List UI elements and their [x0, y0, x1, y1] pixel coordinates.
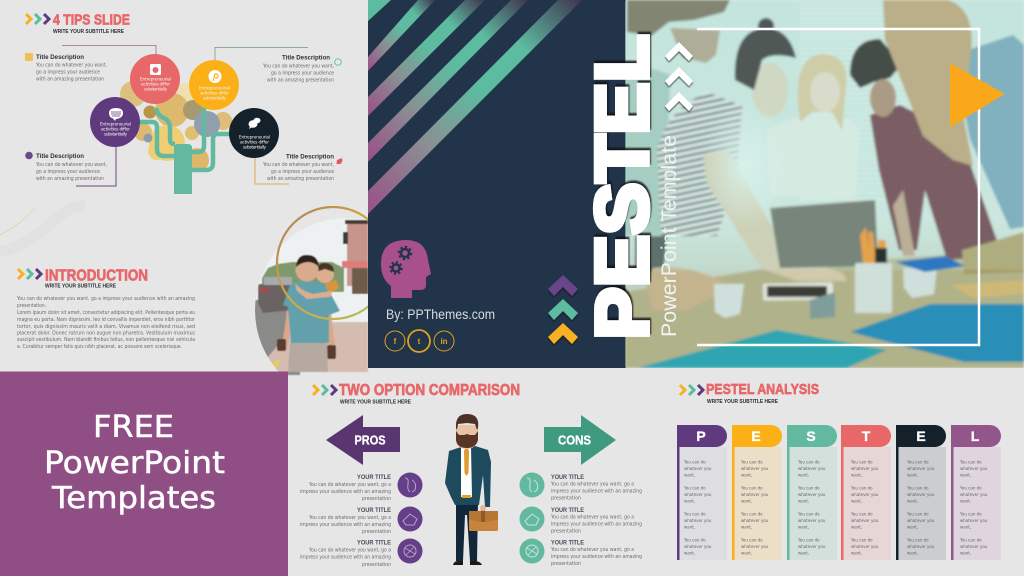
pros item 1 [300, 472, 422, 502]
column L: You can do [959, 512, 982, 516]
column L: whatever you [960, 518, 988, 523]
arrow: cons [544, 415, 616, 465]
column P: You can do [683, 460, 706, 464]
tip: top left [25, 53, 107, 82]
body text: a. Curabitur semper felis quis nibh placerat, ac posuere sem scelerisque. [17, 344, 182, 350]
social icons: f [394, 337, 397, 346]
column E (economic) [732, 425, 782, 560]
title: PESTEL: PESTEL [580, 34, 664, 340]
column S: want, [798, 498, 809, 504]
circle: chat: substantially [243, 144, 266, 150]
column T: T [862, 428, 871, 444]
soft glow [708, 113, 766, 218]
tip: top right: You can do whatever you want, [262, 64, 334, 70]
circle: speech: activities differ [101, 126, 130, 132]
subtitle: comparison: WRITE YOUR SUBTITLE HERE [340, 400, 411, 406]
tip: bottom right: You can do whatever you want, [262, 162, 334, 168]
tip: top right [262, 54, 341, 84]
pros items [300, 472, 422, 568]
cons item 2 [520, 506, 642, 534]
tip: bottom left: go a impress your audience [36, 169, 100, 175]
column E (economic): want, [741, 498, 752, 504]
circle: instagram [130, 54, 180, 104]
panel: free templates [0, 372, 288, 576]
tip: bottom right: go a impress your audience [271, 169, 334, 175]
panel heading: PowerPoint [44, 446, 225, 481]
circle: chat [229, 108, 279, 158]
cons item 1 [520, 472, 642, 502]
column E (environmental): want, [907, 524, 918, 530]
column L [951, 425, 1001, 560]
column L: whatever you [960, 544, 988, 549]
column P: You can do [683, 486, 706, 490]
column E (economic): whatever you [741, 544, 769, 549]
column S: You can do [797, 538, 820, 542]
cons item 1: YOUR TITLE [551, 474, 585, 481]
white chevrons [665, 42, 693, 111]
body text: placerat dolor. Donec rutrum non augue non pharetra. Vestibulum maximus [17, 330, 195, 336]
ring around photo [277, 207, 389, 319]
circle: pinterest: Entrepreneurial [199, 86, 230, 92]
column T: want, [851, 498, 862, 504]
column S: whatever you [798, 544, 826, 549]
column S: S [806, 428, 816, 444]
pros item 2 [300, 506, 422, 535]
column P: want, [684, 550, 695, 556]
column E (economic): want, [741, 550, 752, 556]
column P [677, 425, 727, 560]
heading: two option comparison: TWO OPTION COMPARISON [339, 382, 520, 399]
blonde woman [767, 54, 860, 201]
tip: top right: with an amazing presentation [267, 78, 334, 84]
body text: presentation. [17, 303, 46, 309]
column E (economic): You can do [740, 538, 763, 542]
circle: speech [90, 97, 140, 147]
column E (environmental): want, [907, 498, 918, 504]
column E (economic): whatever you [741, 518, 769, 523]
pros item 3: You can do whatever you want, go a [308, 548, 391, 554]
circle: chat: Entrepreneurial [239, 134, 270, 140]
circle: speech: Entrepreneurial [100, 122, 131, 128]
column T: whatever you [851, 544, 879, 549]
subtitle: PowerPoint Template: PowerPoint Template [658, 135, 681, 337]
column E (environmental): whatever you [907, 518, 935, 523]
man top left [625, 0, 730, 276]
circle: chat: activities differ [240, 140, 269, 146]
panel: pestel analysis [677, 381, 1001, 560]
column L: You can do [959, 486, 982, 490]
column P: want, [684, 472, 695, 478]
tip: top left: go a impress your audience [36, 70, 100, 76]
arrow: cons: CONS [558, 432, 591, 448]
coloured chevrons [548, 275, 578, 344]
arrow: pros [326, 415, 400, 465]
circle: speech: substantially [104, 132, 127, 138]
column S: want, [798, 524, 809, 530]
diagonal stripes [368, 0, 582, 214]
window blinds [802, 3, 882, 54]
column E (environmental): want, [907, 472, 918, 478]
column E (economic): You can do [740, 460, 763, 464]
column P: want, [684, 498, 695, 504]
column E (environmental): whatever you [907, 492, 935, 497]
body text: Lorem ipsum dolor sit amet, consectetur adipiscing elit. Pellentesque porta eu [17, 310, 195, 316]
byline: By: PPThemes.com [386, 306, 495, 322]
column L: L [971, 428, 980, 444]
column T [841, 425, 891, 560]
tip: top left: Title Description [36, 54, 84, 61]
column E (economic): want, [741, 472, 752, 478]
tree illustration [120, 81, 232, 194]
pros item 3 [300, 538, 422, 568]
tip: top right: Title Description [282, 54, 330, 62]
circle: pinterest: activities differ [200, 90, 229, 96]
pros item 2: You can do whatever you want, go a [308, 515, 391, 521]
purple background [0, 372, 288, 576]
column T: whatever you [851, 518, 879, 523]
orange play triangle [950, 63, 1005, 127]
column E (environmental): You can do [906, 538, 929, 542]
panel heading: Templates [51, 481, 216, 516]
circle: instagram: Entrepreneurial [140, 76, 171, 82]
column S: You can do [797, 486, 820, 490]
soft overlay [625, 0, 1024, 270]
column L: want, [960, 472, 971, 478]
cons item 2: impress your audience with an amazing [551, 522, 642, 528]
column E (environmental): E [916, 428, 926, 444]
pros item 3: impress your audience with an amazing [300, 554, 391, 560]
column L: whatever you [960, 466, 988, 471]
tip: bottom right [262, 154, 342, 182]
cons items [520, 472, 642, 567]
panel: center dark cover [368, 0, 626, 368]
panel: two option comparison [300, 382, 642, 568]
man in plaid shirt [850, 39, 1002, 260]
column E (environmental) [896, 425, 946, 560]
photo backdrop [625, 0, 1024, 292]
column P: whatever you [684, 544, 712, 549]
chevrons: pestel title [680, 385, 703, 395]
column E (environmental): whatever you [907, 544, 935, 549]
column S: whatever you [798, 518, 826, 523]
column E (economic): want, [741, 524, 752, 530]
tip: bottom left: Title Description [36, 153, 84, 160]
social icons: in [440, 337, 448, 346]
column E (environmental): You can do [906, 512, 929, 516]
pros item 2: presentation [362, 529, 391, 535]
column P: You can do [683, 538, 706, 542]
heading: introduction: INTRODUCTION [45, 268, 148, 284]
tip: top left: with an amazing presentation [36, 76, 104, 82]
circle: pinterest [189, 60, 239, 110]
column T: want, [851, 550, 862, 556]
column E (economic): You can do [740, 486, 763, 490]
pros item 1: presentation [362, 496, 391, 502]
arrow: pros: PROS [354, 432, 386, 448]
column L: want, [960, 550, 971, 556]
businessman illustration [445, 414, 498, 565]
cons item 2: You can do whatever you want, go a [550, 514, 634, 520]
column E (environmental): want, [907, 550, 918, 556]
column T: want, [851, 524, 862, 530]
body text: suscipit vestibulum. Nam blandit finibus tellus, non pellentesque nisl vehicula [17, 337, 195, 343]
heading: 4 tips slide: 4 TIPS SLIDE [53, 12, 130, 28]
subtitle: introduction: WRITE YOUR SUBTITLE HERE [45, 284, 116, 290]
social icons: t [418, 337, 421, 346]
column T: You can do [850, 460, 873, 464]
cons item 3: impress your audience with an amazing [551, 554, 642, 560]
column E (economic): You can do [740, 512, 763, 516]
column P: whatever you [684, 518, 712, 523]
panel heading [44, 410, 225, 516]
cons item 3: presentation [551, 561, 581, 567]
social icons [385, 330, 454, 352]
column E (environmental): You can do [906, 486, 929, 490]
column P: whatever you [684, 492, 712, 497]
column T: You can do [850, 486, 873, 490]
column T: whatever you [851, 466, 879, 471]
table [625, 250, 1024, 368]
pros item 3: YOUR TITLE [357, 540, 392, 546]
subtitle: tips: WRITE YOUR SUBTITLE HERE [53, 29, 124, 35]
pros item 1: YOUR TITLE [357, 474, 392, 481]
cons item 3 [520, 538, 642, 567]
decorative swoosh [0, 206, 85, 252]
icon: head with gears [381, 240, 431, 298]
heading: pestel analysis: PESTEL ANALYSIS [706, 381, 819, 398]
circle: pinterest: substantially [203, 96, 226, 102]
column L: whatever you [960, 492, 988, 497]
tip: bottom left [25, 152, 107, 182]
white frame [697, 29, 979, 345]
cons item 3: YOUR TITLE [551, 540, 585, 546]
column E (environmental): You can do [906, 460, 929, 464]
column T: You can do [850, 538, 873, 542]
tip: top right: go a impress your audience [271, 70, 334, 76]
column E (economic): E [751, 428, 761, 444]
cons item 1: presentation [551, 496, 581, 502]
column L: want, [960, 498, 971, 504]
column P: P [696, 428, 706, 444]
column S: whatever you [798, 466, 826, 471]
pros item 2: impress your audience with an amazing [300, 522, 391, 528]
column L: want, [960, 524, 971, 530]
laptop [770, 200, 878, 268]
column T: You can do [850, 512, 873, 516]
panel heading: FREE [93, 410, 174, 445]
column T: want, [851, 472, 862, 478]
column T: whatever you [851, 492, 879, 497]
chevrons: intro title [18, 269, 41, 279]
column S: want, [798, 472, 809, 478]
column S: You can do [797, 512, 820, 516]
photo: father and child [250, 215, 368, 375]
column S: whatever you [798, 492, 826, 497]
desk items [637, 227, 1024, 368]
column E (environmental): whatever you [907, 466, 935, 471]
tip: bottom left: with an amazing presentation [36, 176, 104, 182]
body text: You can do whatever you want, go a impress your audience with an amazing [16, 296, 195, 302]
panel: introduction [0, 206, 389, 375]
body text: tortor, quis dignissim mauris velit a diam. Vivamus non eleifend risus, sed [17, 324, 195, 330]
column L: You can do [959, 460, 982, 464]
column S: You can do [797, 460, 820, 464]
column S: want, [798, 550, 809, 556]
dark background [368, 0, 626, 368]
photo: team around a table [625, 0, 1024, 368]
chevrons: comparison title [313, 385, 336, 395]
connector lines [62, 46, 308, 186]
cons item 2: presentation [551, 528, 581, 534]
cons item 3: You can do whatever you want, go a [550, 547, 634, 553]
cons item 1: You can do whatever you want, go a [550, 482, 634, 488]
cons item 1: impress your audience with an amazing [551, 488, 642, 494]
woman in denim jacket [883, 0, 1024, 274]
body text [16, 296, 196, 350]
panel: 4 tips slide [25, 12, 342, 194]
cons item 2: YOUR TITLE [551, 507, 585, 514]
pros item 1: impress your audience with an amazing [300, 489, 391, 495]
column E (economic): whatever you [741, 492, 769, 497]
column S [787, 425, 837, 560]
body text: magna eu porta. Nam dignissim, leo id convallis imperdiet, eros nibh porttitor [17, 317, 196, 323]
tip: bottom right: with an amazing presentation [267, 176, 334, 182]
circle: instagram: substantially [144, 86, 167, 92]
column P: whatever you [684, 466, 712, 471]
woman in striped top [645, 18, 847, 310]
tip: bottom right: Title Description [286, 154, 334, 160]
chevrons: tips title [26, 14, 49, 24]
tip: bottom left: You can do whatever you want, [35, 162, 107, 168]
pros item 1: You can do whatever you want, go a [308, 482, 391, 488]
column P: want, [684, 524, 695, 530]
column L: You can do [959, 538, 982, 542]
subtitle: pestel: WRITE YOUR SUBTITLE HERE [707, 399, 778, 405]
pros item 2: YOUR TITLE [357, 507, 392, 514]
tip: top left: You can do whatever you want, [35, 62, 107, 68]
column E (economic): whatever you [741, 466, 769, 471]
column P: You can do [683, 512, 706, 516]
circle: instagram: activities differ [141, 82, 170, 88]
pros item 3: presentation [362, 562, 391, 568]
